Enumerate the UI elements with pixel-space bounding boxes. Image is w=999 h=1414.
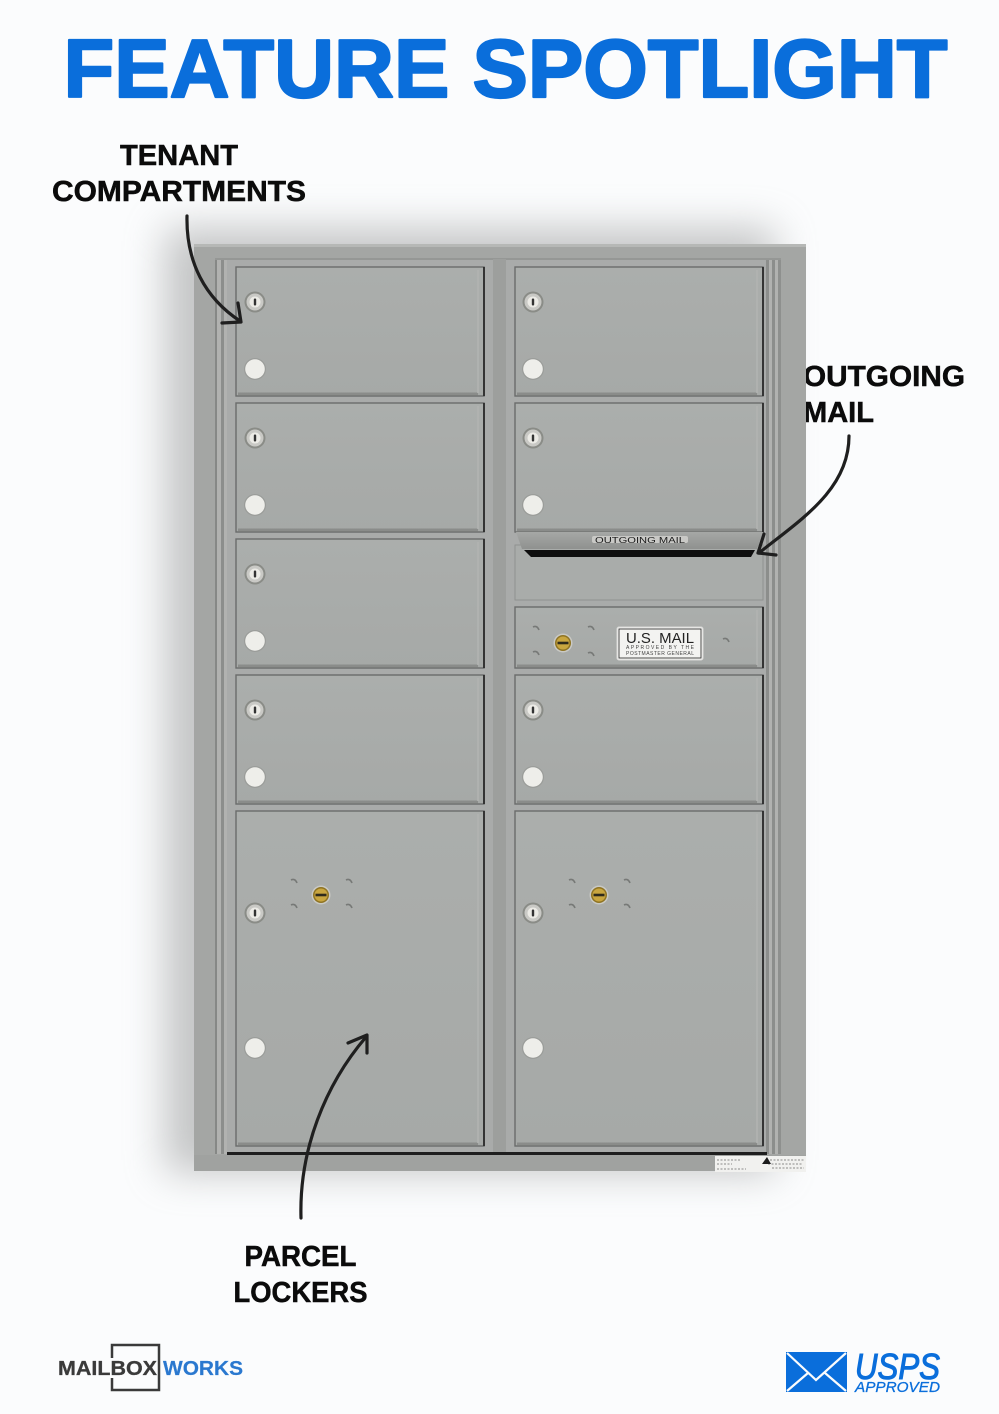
arrow: parcel lockers <box>301 1035 367 1218</box>
top rail <box>215 258 781 260</box>
label: outgoing mail: MAIL <box>803 397 874 429</box>
left column doors <box>236 267 484 1146</box>
centre divider <box>493 259 506 1154</box>
logo: USPS Approved <box>786 1346 940 1396</box>
mailbox unit <box>194 244 806 1172</box>
logo: Mailbox Works: WORKS <box>163 1357 243 1380</box>
outgoing mail panel <box>515 545 763 600</box>
logo: Mailbox Works <box>58 1345 243 1390</box>
label: outgoing mail: OUTGOING <box>803 361 965 393</box>
left rail grooves <box>215 259 227 1154</box>
icon: envelope <box>786 1352 847 1392</box>
outgoing mail hood <box>516 532 763 557</box>
arrow: tenant compartments <box>187 216 241 323</box>
outer frame <box>194 244 806 1171</box>
label: tenant compartments: TENANT <box>120 140 238 172</box>
U.S. Mail plate: APPROVED BY THE <box>626 645 695 651</box>
U.S. Mail plate: POSTMASTER GENERAL <box>626 651 694 657</box>
U.S. Mail plate <box>617 627 703 660</box>
arrow: outgoing mail <box>758 436 849 555</box>
U.S. Mail plate: U.S. MAIL <box>626 630 694 647</box>
right rail grooves <box>766 259 781 1154</box>
mailbox shadow <box>165 228 775 1173</box>
label: parcel lockers <box>234 1241 368 1309</box>
manufacturer sticker <box>715 1156 806 1172</box>
logo: USPS Approved: USPS <box>855 1346 940 1387</box>
logo: USPS Approved: APPROVED <box>854 1379 940 1396</box>
label: tenant compartments: COMPARTMENTS <box>52 176 306 208</box>
brass parcel locks and screws <box>291 626 729 908</box>
title: FEATURE SPOTLIGHT <box>64 22 947 115</box>
bottom black seam <box>227 1152 767 1155</box>
logo: Mailbox Works: MAILBOX <box>58 1357 157 1380</box>
label: outgoing mail <box>803 361 965 429</box>
tenant door locks <box>244 292 544 1059</box>
right column doors <box>515 267 763 1146</box>
label: parcel lockers: PARCEL <box>244 1241 356 1273</box>
outgoing mail hood: OUTGOING MAIL <box>595 536 686 545</box>
label: tenant compartments <box>52 140 306 208</box>
label: parcel lockers: LOCKERS <box>234 1277 368 1309</box>
